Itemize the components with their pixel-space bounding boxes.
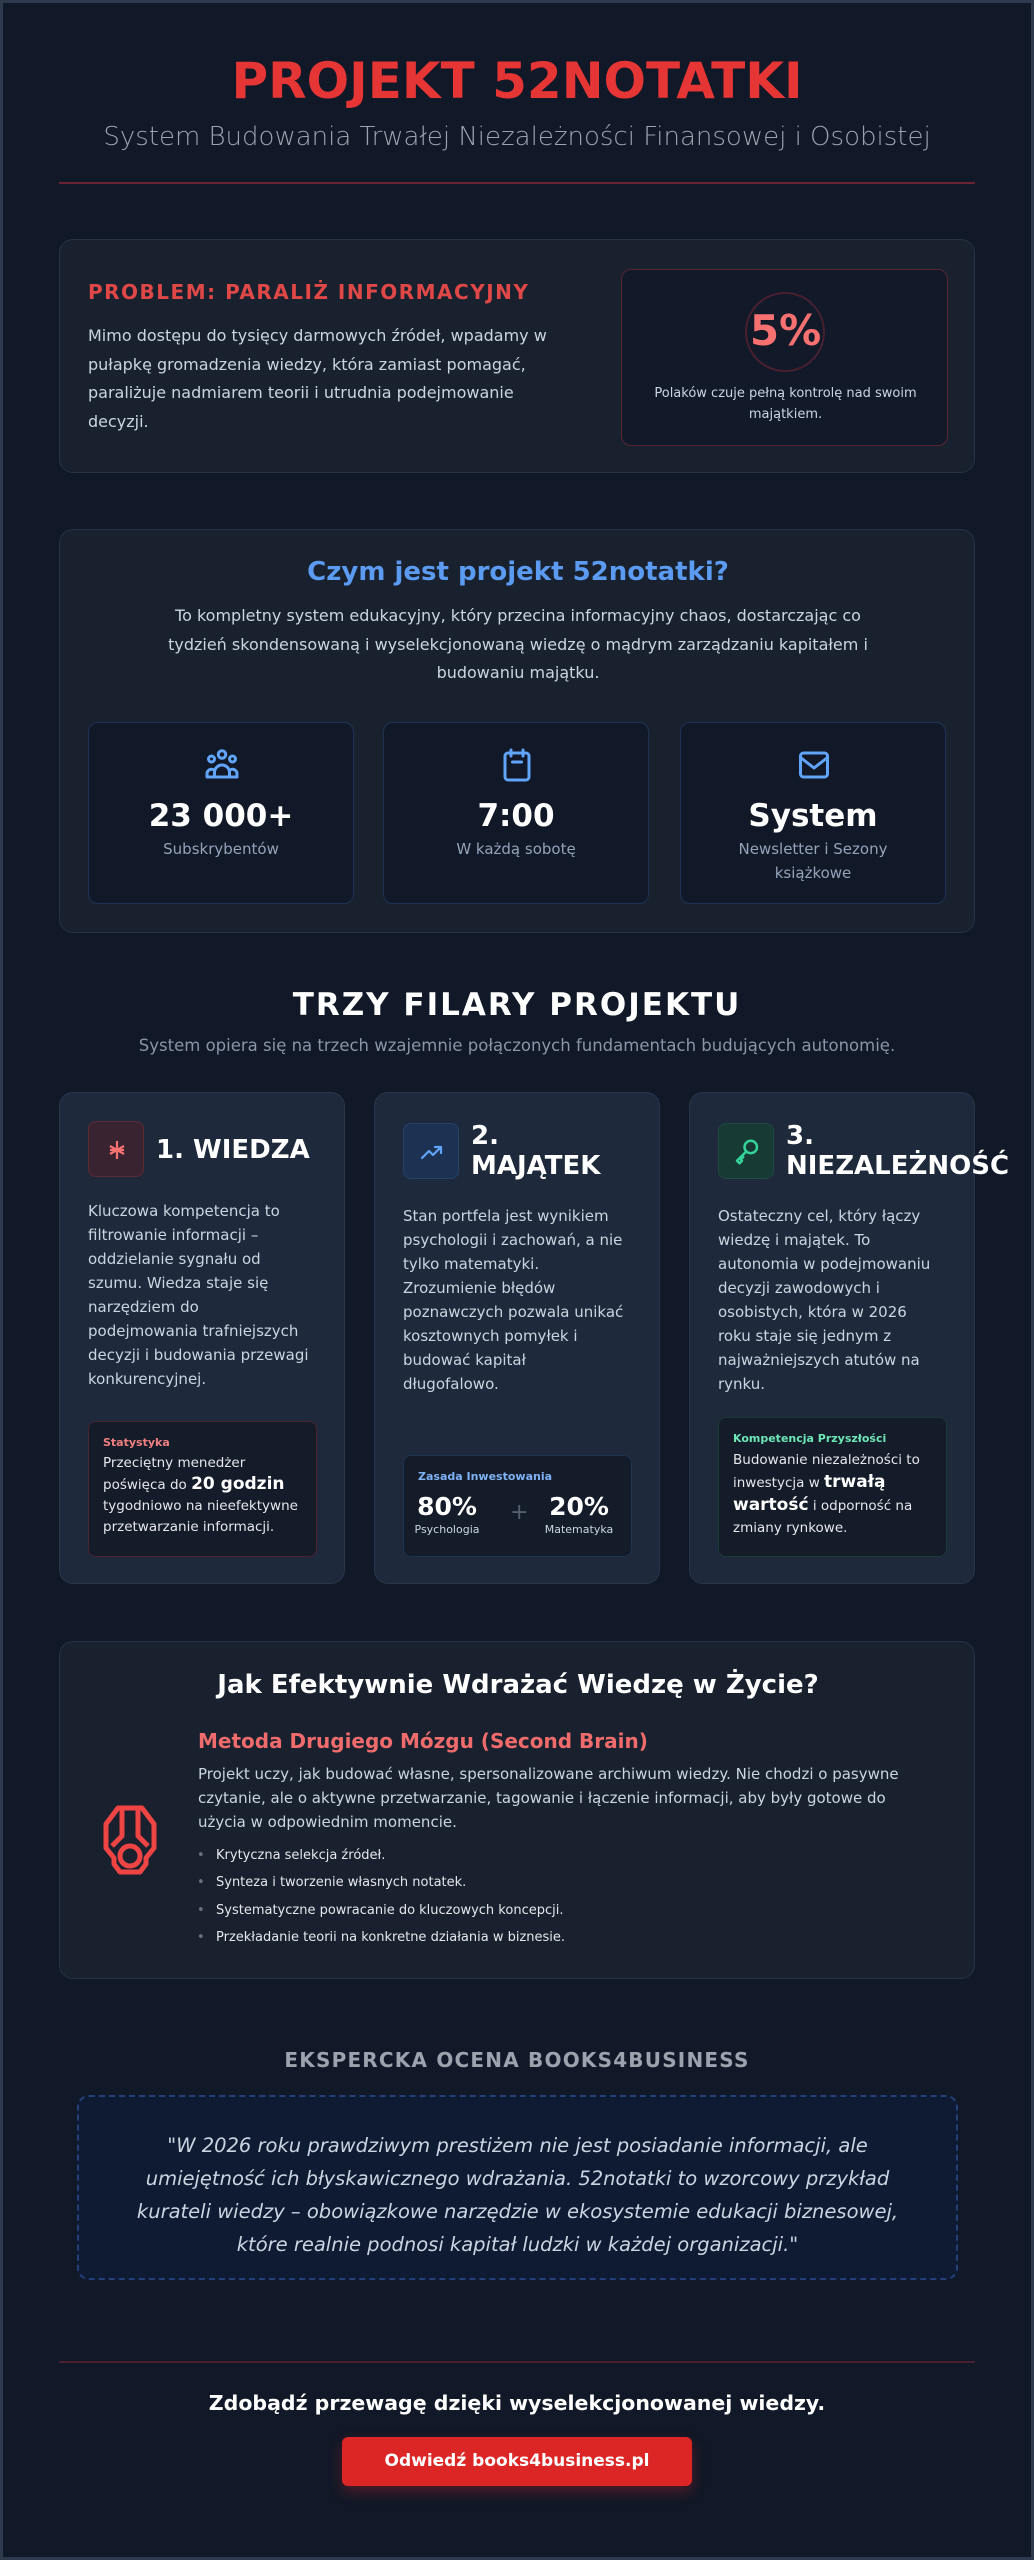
panel: problem bbox=[59, 239, 975, 473]
panel: pillar 3 bbox=[689, 1092, 975, 1584]
section heading: pillars: TRZY FILARY PROJEKTU bbox=[293, 987, 741, 1023]
rule box: Matematyka bbox=[545, 1523, 613, 1536]
competence box: Budowanie niezależności to inwestycja w trwałą wartość i odporność na zmiany rynkowe. bbox=[733, 1452, 920, 1536]
icon: trend bbox=[403, 1123, 459, 1179]
pillar title: 1. WIEDZA bbox=[156, 1135, 310, 1165]
subheading: Metoda Drugiego Mózgu (Second Brain) bbox=[198, 1729, 648, 1753]
quote box: "W 2026 roku prawdziwym prestiżem nie jest posiadanie informacji, ale umiejętność ich błyskawicznego wdrażania. 52notatki to wzorcowy przykład kurateli wiedzy – obowiązkowe narzędzie w ekosystemie edukacji biznesowej, które realnie podnosi kapitał ludzki w każdej organizacji." bbox=[137, 2134, 898, 2256]
icon: asterisk bbox=[88, 1121, 144, 1177]
stat box: Statystyka bbox=[103, 1436, 170, 1449]
bullet list: Krytyczna selekcja źródeł. bbox=[216, 1848, 385, 1863]
pillar title: 3. bbox=[786, 1121, 814, 1151]
rule box: + bbox=[510, 1500, 528, 1525]
heading: Jak Efektywnie Wdrażać Wiedzę w Życie? bbox=[217, 1670, 819, 1700]
call to action text: Zdobądź przewagę dzięki wyselekcjonowanej wiedzy. bbox=[209, 2391, 825, 2415]
competence box: Kompetencja Przyszłości bbox=[733, 1432, 886, 1445]
subtitle: System Budowania Trwałej Niezależności Finansowej i Osobistej bbox=[103, 122, 931, 152]
paragraph: Projekt uczy, jak budować własne, spersonalizowane archiwum wiedzy. Nie chodzi o pasywne czytanie, ale o aktywne przetwarzanie, tagowanie i łączenie informacji, aby były gotowe do użycia w odpowiednim momencie. bbox=[198, 1765, 899, 1831]
rule box: 20% bbox=[549, 1492, 609, 1521]
icon: calendar bbox=[504, 748, 530, 782]
icon: mail bbox=[798, 752, 830, 778]
rule box bbox=[403, 1455, 632, 1557]
panel: second brain bbox=[59, 1641, 975, 1979]
stat: system: Newsletter i Sezony książkowe bbox=[738, 840, 887, 882]
panel: pillar 1 bbox=[59, 1092, 345, 1584]
pillar title bbox=[786, 1121, 1009, 1181]
rule box: Zasada Inwestowania bbox=[418, 1470, 552, 1483]
icon: brain bbox=[104, 1806, 156, 1874]
pillar text: Kluczowa kompetencja to filtrowanie informacji – oddzielanie sygnału od szumu. Wiedza staje się narzędziem do podejmowania trafniejszych decyzji i budowania przewagi konkurencyjnej. bbox=[88, 1202, 309, 1388]
stat: subscribers: Subskrybentów bbox=[163, 840, 279, 858]
stat: time: 7:00 bbox=[477, 798, 555, 834]
stat: subscribers bbox=[88, 722, 354, 904]
stat: time: W każdą sobotę bbox=[456, 840, 576, 858]
rule box: Psychologia bbox=[414, 1523, 480, 1536]
icon: key bbox=[718, 1123, 774, 1179]
stat: time bbox=[383, 722, 649, 904]
problem text: Mimo dostępu do tysięcy darmowych źródeł, wpadamy w pułapkę gromadzenia wiedzy, która zamiast pomagać, paraliżuje nadmiarem teorii i utrudnia podejmowanie decyzji. bbox=[88, 326, 547, 430]
pillar title: NIEZALEŻNOŚĆ bbox=[786, 1151, 1009, 1181]
stat: system bbox=[680, 722, 946, 904]
bullet list bbox=[199, 1848, 565, 1945]
bullet list: Systematyczne powracanie do kluczowych koncepcji. bbox=[216, 1903, 563, 1918]
panel: pillar 2 bbox=[374, 1092, 660, 1584]
callout: 5%: 5% bbox=[750, 306, 821, 355]
description: To kompletny system edukacyjny, który przecina informacyjny chaos, dostarczając co tydzień skondensowaną i wyselekcjonowaną wiedzę o mądrym zarządzaniu kapitałem i budowaniu majątku. bbox=[168, 606, 868, 682]
competence box bbox=[718, 1417, 947, 1557]
pillar text: Stan portfela jest wynikiem psychologii i zachowań, a nie tylko matematyki. Zrozumienie błędów poznawczych pozwala unikać kosztownych pomyłek i budować kapitał długofalowo. bbox=[403, 1207, 623, 1393]
pillar title: MAJĄTEK bbox=[471, 1151, 600, 1181]
problem heading: PROBLEM: PARALIŻ INFORMACYJNY bbox=[88, 280, 529, 304]
pillar text: Ostateczny cel, który łączy wiedzę i majątek. To autonomia w podejmowaniu decyzji zawodowych i osobistych, która w 2026 roku staje się jednym z najważniejszych atutów na rynku. bbox=[718, 1207, 930, 1393]
stat box bbox=[88, 1421, 317, 1557]
bullet list: Przekładanie teorii na konkretne działania w biznesie. bbox=[216, 1930, 565, 1945]
expert heading: EKSPERCKA OCENA BOOKS4BUSINESS bbox=[284, 2048, 750, 2072]
rule box: 80% bbox=[417, 1492, 477, 1521]
pillar title: 2. bbox=[471, 1121, 499, 1151]
section subtitle: System opiera się na trzech wzajemnie połączonych fundamentach budujących autonomię. bbox=[139, 1036, 895, 1055]
button: Odwiedź books4business.pl bbox=[384, 2451, 650, 2471]
title: PROJEKT 52NOTATKI bbox=[231, 52, 803, 110]
callout: 5%: Polaków czuje pełną kontrolę nad swoim majątkiem. bbox=[654, 386, 917, 422]
stat: subscribers: 23 000+ bbox=[149, 798, 293, 834]
stat box: Przeciętny menedżer poświęca do 20 godzin tygodniowo na nieefektywne przetwarzanie informacji. bbox=[103, 1455, 298, 1535]
heading: Czym jest projekt 52notatki? bbox=[307, 557, 729, 587]
pillar title bbox=[471, 1121, 602, 1181]
stat: system: System bbox=[748, 798, 878, 834]
callout: 5% bbox=[621, 269, 948, 446]
quote box bbox=[77, 2095, 958, 2280]
panel: what is bbox=[59, 529, 975, 933]
icon: users bbox=[206, 749, 238, 778]
button bbox=[342, 2437, 692, 2486]
bullet list: Synteza i tworzenie własnych notatek. bbox=[216, 1875, 466, 1890]
